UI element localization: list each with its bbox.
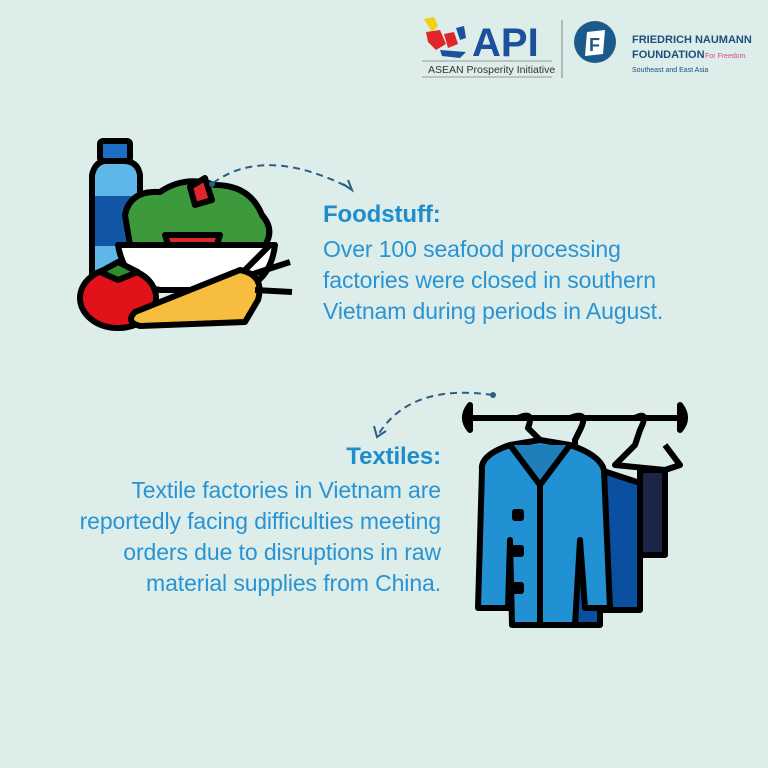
logo: Friedrich Naumann Foundation: F <box>589 35 600 55</box>
icon: food <box>77 138 292 331</box>
logo: Friedrich Naumann Foundation: For Freedom. <box>705 53 747 60</box>
arrow: food <box>209 164 354 192</box>
text: Foodstuff body: Vietnam during periods in August. <box>323 298 663 324</box>
logo: API: API <box>472 21 539 65</box>
heading: Textiles: Textiles: <box>346 443 441 470</box>
logo: Friedrich Naumann Foundation: Southeast and East Asia <box>632 67 708 74</box>
logo: API: ASEAN Prosperity Initiative <box>428 64 555 76</box>
text: Textiles body: reportedly facing difficulties meeting <box>80 508 441 534</box>
text: Foodstuff body: Over 100 seafood processing <box>323 236 621 262</box>
logo: Friedrich Naumann Foundation: FRIEDRICH NAUMANN <box>632 34 752 46</box>
icon: ASEAN map <box>424 17 466 58</box>
heading: Foodstuff: Foodstuff: <box>323 201 441 228</box>
text: Textiles body: orders due to disruptions in raw <box>123 539 441 565</box>
logo: Friedrich Naumann Foundation <box>562 20 752 78</box>
logo: Friedrich Naumann Foundation: FOUNDATION <box>632 49 705 61</box>
text: Textiles body: material supplies from China. <box>146 570 441 596</box>
text: Foodstuff body <box>323 236 663 324</box>
text: Foodstuff body: factories were closed in southern <box>323 267 656 293</box>
logo: API <box>422 17 555 78</box>
text: Textiles body: Textile factories in Vietnam are <box>131 477 441 503</box>
arrow: textiles <box>373 392 496 439</box>
text: Textiles body <box>80 477 442 596</box>
icon: clothes rack <box>462 402 688 628</box>
